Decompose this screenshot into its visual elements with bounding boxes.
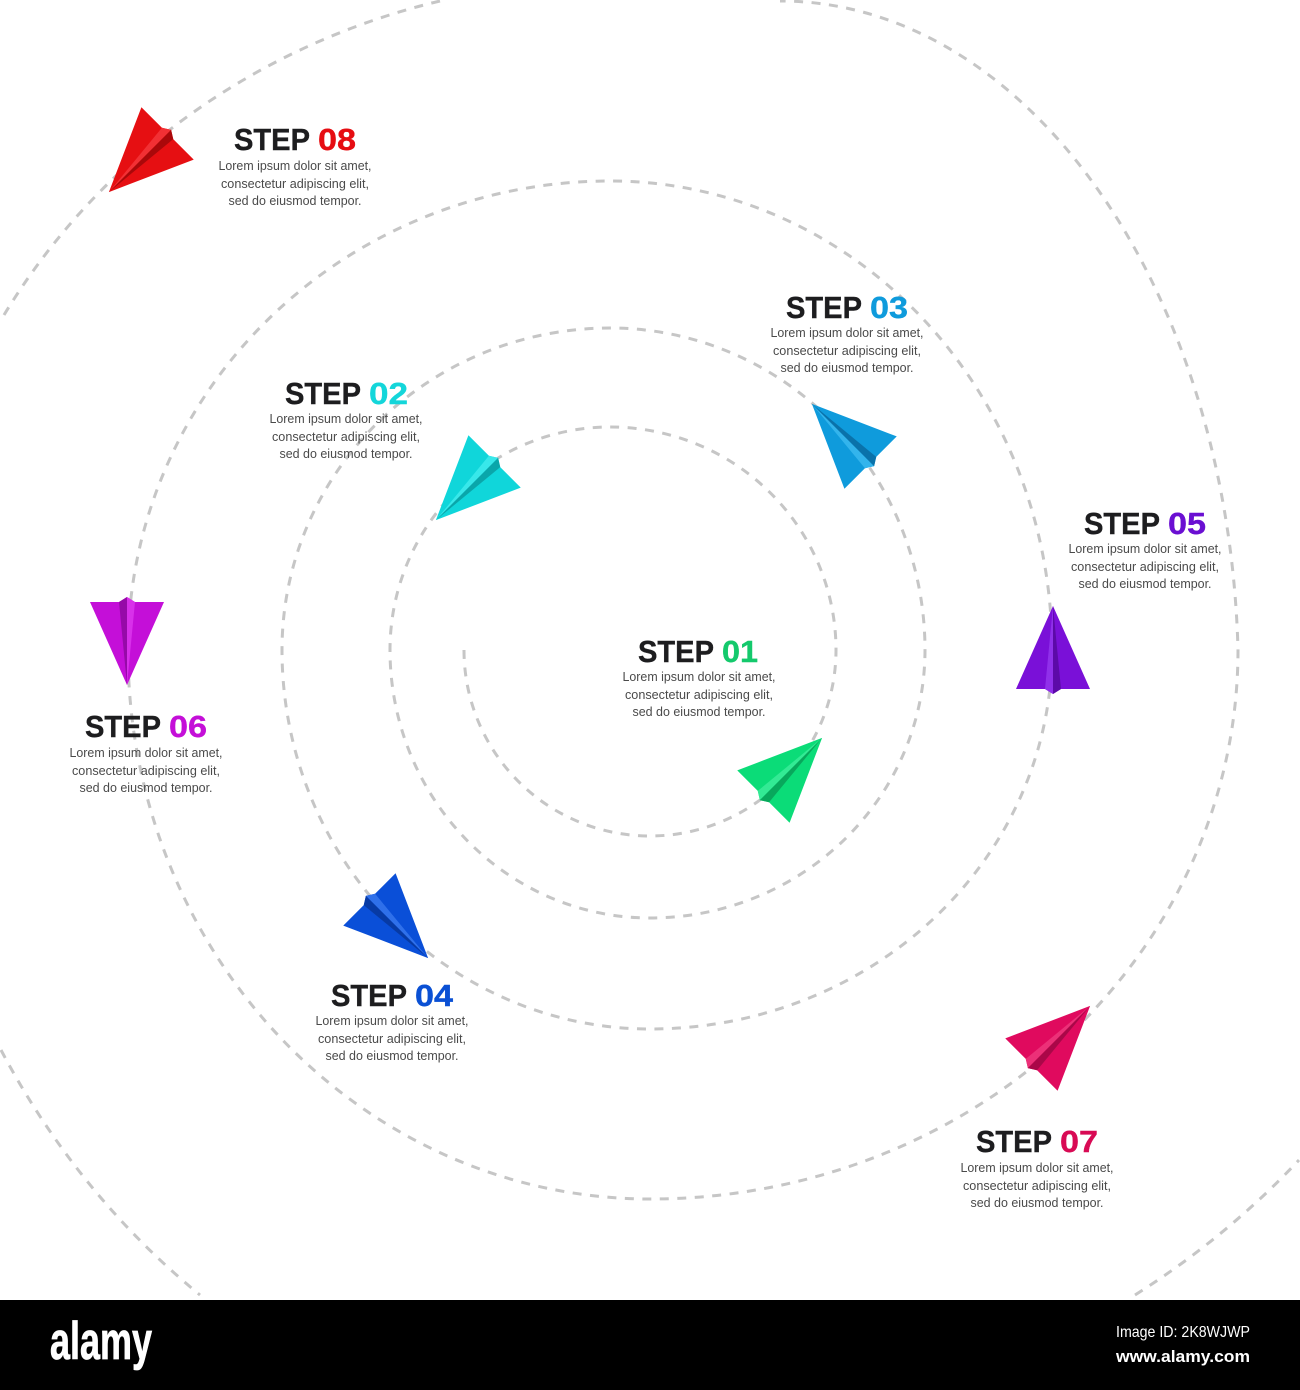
step 07: text: consectetur adipiscing elit, bbox=[963, 1178, 1111, 1193]
step 04: text: 04 bbox=[415, 978, 454, 1013]
step 07: text: sed do eiusmod tempor. bbox=[970, 1195, 1104, 1210]
website: www.alamy.com bbox=[1115, 1347, 1250, 1366]
step 08: text: STEP bbox=[234, 122, 310, 157]
step 06: plane bbox=[90, 597, 164, 685]
step 08: text bbox=[218, 122, 372, 208]
step 02: plane bbox=[410, 432, 524, 546]
step 07: text: 07 bbox=[1060, 1124, 1098, 1159]
step 06: text: Lorem ipsum dolor sit amet, bbox=[70, 745, 222, 760]
step 01: text: STEP bbox=[638, 634, 714, 669]
step 07: text: STEP bbox=[976, 1124, 1052, 1159]
step 05: text bbox=[1068, 506, 1222, 591]
step 03: plane bbox=[786, 378, 900, 492]
step 01: text bbox=[622, 634, 776, 719]
step 05: text: Lorem ipsum dolor sit amet, bbox=[1068, 541, 1222, 556]
step 03: text: consectetur adipiscing elit, bbox=[773, 343, 921, 358]
step 03: text: 03 bbox=[870, 290, 908, 325]
step 01: text: 01 bbox=[722, 634, 758, 669]
step 03: text: Lorem ipsum dolor sit amet, bbox=[770, 325, 924, 340]
watermark footer bar bbox=[0, 1300, 1300, 1390]
step 05: text: STEP bbox=[1084, 506, 1160, 541]
step 02: text: Lorem ipsum dolor sit amet, bbox=[270, 411, 422, 426]
step 08: text: sed do eiusmod tempor. bbox=[228, 193, 362, 208]
step 01: text: consectetur adipiscing elit, bbox=[625, 687, 773, 702]
step 07: plane bbox=[1002, 980, 1116, 1094]
step 06: text: consectetur adipiscing elit, bbox=[72, 763, 220, 778]
step 02: text bbox=[270, 376, 422, 461]
step 04: text bbox=[316, 978, 468, 1063]
step 08: text: consectetur adipiscing elit, bbox=[221, 176, 369, 191]
step 02: text: 02 bbox=[369, 376, 408, 411]
image id: Image ID: 2K8WJWP bbox=[1116, 1324, 1250, 1341]
step 05: text: consectetur adipiscing elit, bbox=[1071, 559, 1219, 574]
step 05: text: 05 bbox=[1168, 506, 1206, 541]
step 07: text bbox=[960, 1124, 1114, 1210]
step 04: plane bbox=[340, 870, 454, 984]
step 01: text: sed do eiusmod tempor. bbox=[632, 704, 766, 719]
step 04: text: STEP bbox=[331, 978, 407, 1013]
step 02: text: STEP bbox=[285, 376, 361, 411]
step 06: text bbox=[70, 709, 222, 795]
step 06: text: 06 bbox=[169, 709, 207, 744]
step 06: text: sed do eiusmod tempor. bbox=[80, 780, 212, 795]
step 05: text: sed do eiusmod tempor. bbox=[1078, 576, 1212, 591]
step 01: text: Lorem ipsum dolor sit amet, bbox=[622, 669, 776, 684]
step 02: text: consectetur adipiscing elit, bbox=[272, 429, 420, 444]
step 07: text: Lorem ipsum dolor sit amet, bbox=[960, 1160, 1114, 1175]
step 03: text: STEP bbox=[786, 290, 862, 325]
step 08: text: 08 bbox=[318, 122, 356, 157]
step 06: text: STEP bbox=[85, 709, 161, 744]
step 05: plane bbox=[1016, 606, 1090, 694]
step 04: text: Lorem ipsum dolor sit amet, bbox=[316, 1013, 468, 1028]
step 03: text bbox=[770, 290, 924, 375]
step 08: text: Lorem ipsum dolor sit amet, bbox=[218, 158, 372, 173]
step 03: text: sed do eiusmod tempor. bbox=[780, 360, 914, 375]
step 02: text: sed do eiusmod tempor. bbox=[280, 446, 412, 461]
step 04: text: sed do eiusmod tempor. bbox=[326, 1048, 458, 1063]
step 01: plane bbox=[734, 712, 848, 826]
step 08: plane bbox=[83, 104, 197, 218]
step 04: text: consectetur adipiscing elit, bbox=[318, 1031, 466, 1046]
alamy logo: alamy bbox=[50, 1312, 152, 1371]
